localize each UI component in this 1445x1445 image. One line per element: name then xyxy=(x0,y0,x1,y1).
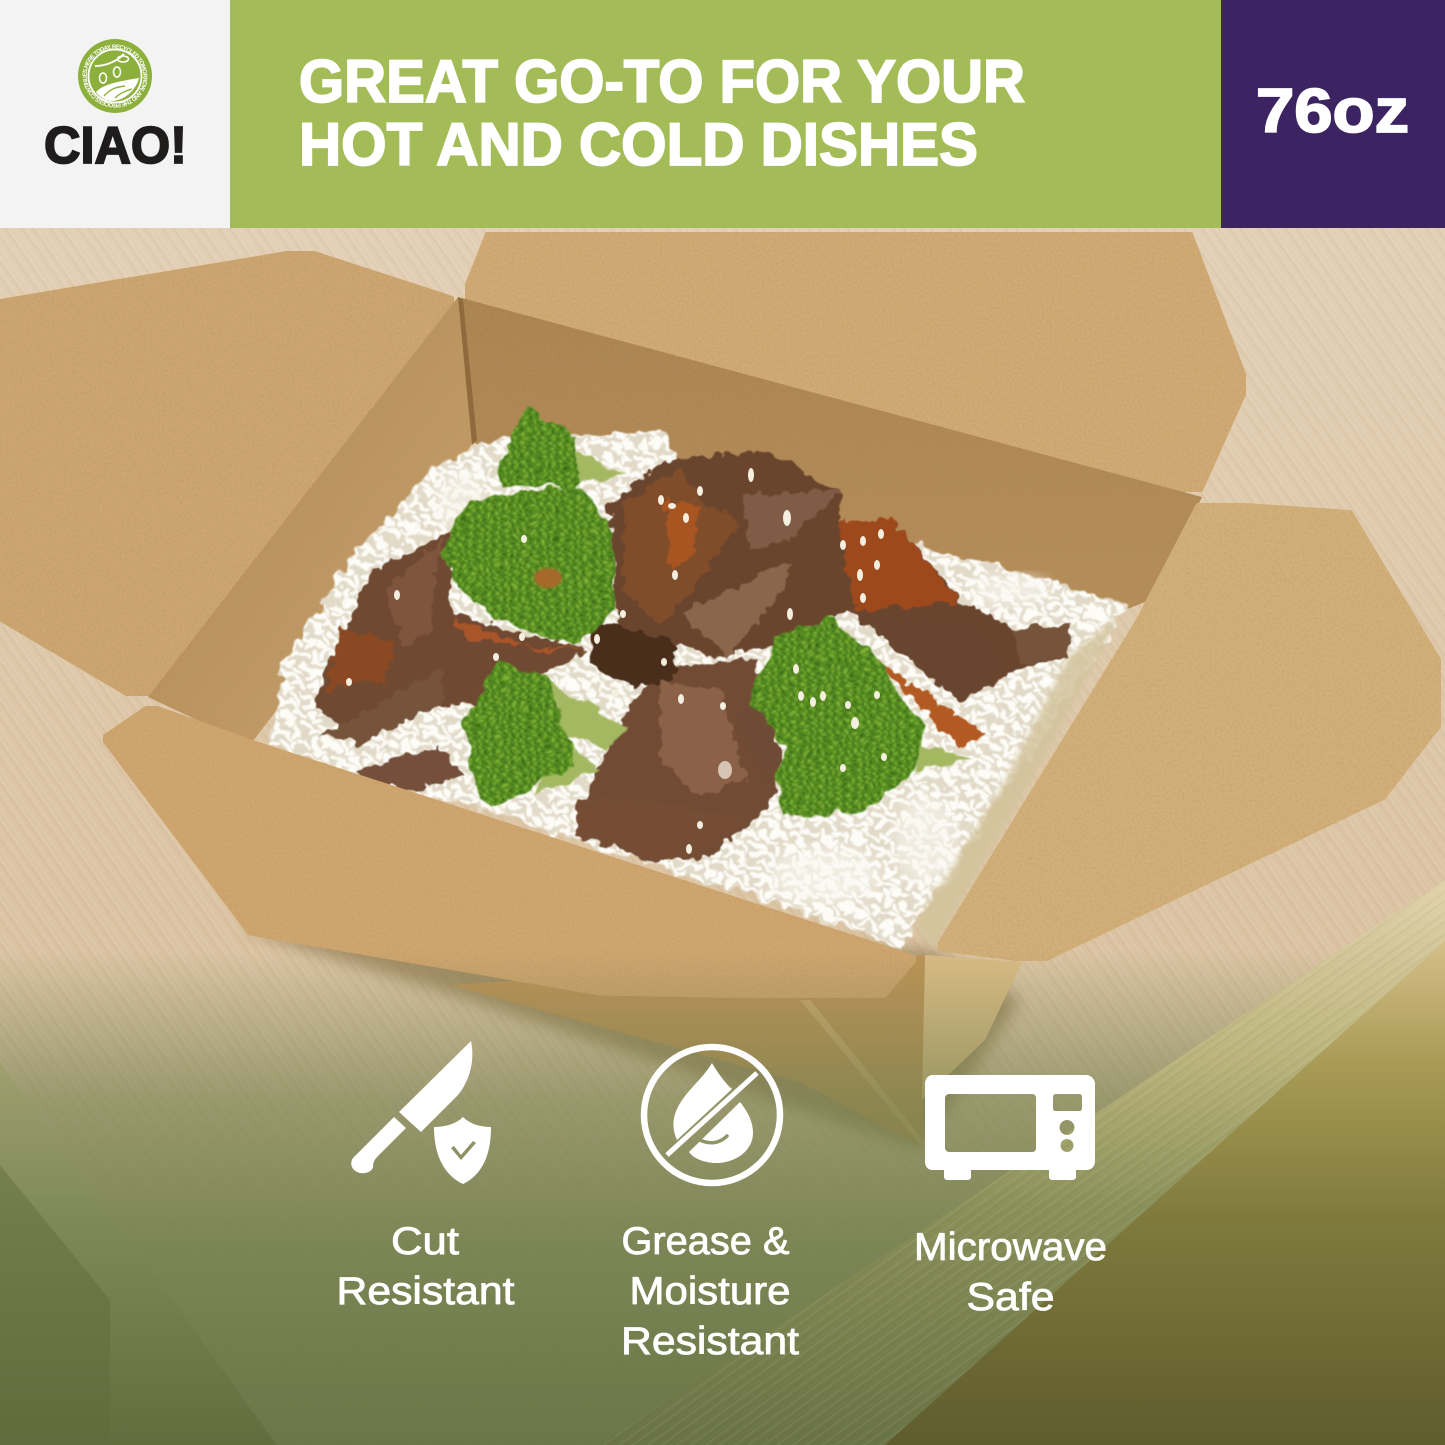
label: grease and moisture resistant: Grease & xyxy=(622,1220,790,1263)
label: cut resistant xyxy=(336,1220,515,1313)
icon: grease and moisture crossed out xyxy=(644,1047,780,1183)
box: front flap xyxy=(103,706,916,998)
header: purple size band xyxy=(1221,0,1445,228)
table: light bevel band xyxy=(600,880,1445,1445)
box: inner back wall xyxy=(458,297,1202,610)
box: right flap xyxy=(938,503,1441,961)
logo: wordmark: CIAO! xyxy=(44,117,187,175)
title xyxy=(299,48,1025,178)
label: microwave safe xyxy=(914,1226,1107,1319)
food: rice xyxy=(268,432,1130,950)
title: HOT AND COLD DISHES xyxy=(299,111,978,178)
food: sesame seeds xyxy=(346,468,887,854)
table: right lower corner xyxy=(885,941,1445,1445)
icon: knife with shield xyxy=(351,1041,491,1184)
box: left flap xyxy=(0,251,454,696)
food: beef pieces xyxy=(313,450,1071,860)
header: logo panel xyxy=(0,0,230,228)
table: left lower wedge xyxy=(0,1062,277,1445)
size label: 76oz xyxy=(1256,77,1409,146)
label: microwave safe: Safe xyxy=(966,1276,1054,1319)
label: grease and moisture resistant xyxy=(621,1220,799,1363)
food: broccoli xyxy=(442,407,970,818)
icon: microwave xyxy=(925,1075,1095,1180)
label: cut resistant: Resistant xyxy=(336,1270,515,1313)
logo: circular emblem: HERE TODAY, RECYCLED TOMORROW, AND THE PROCESS CONTINUES. xyxy=(82,44,148,108)
label: cut resistant: Cut xyxy=(391,1220,459,1263)
box: inner left wall xyxy=(148,297,475,745)
box: back flap xyxy=(465,232,1246,492)
box: outer side panels xyxy=(450,955,1022,1147)
label: grease and moisture resistant: Moisture xyxy=(630,1270,790,1313)
gradient overlay xyxy=(0,968,1346,1445)
header: green title band xyxy=(230,0,1221,228)
label: microwave safe: Microwave xyxy=(914,1226,1107,1269)
title: GREAT GO-TO FOR YOUR xyxy=(299,48,1025,115)
box shadow on table xyxy=(240,930,1020,1150)
label: grease and moisture resistant: Resistant xyxy=(621,1320,799,1363)
